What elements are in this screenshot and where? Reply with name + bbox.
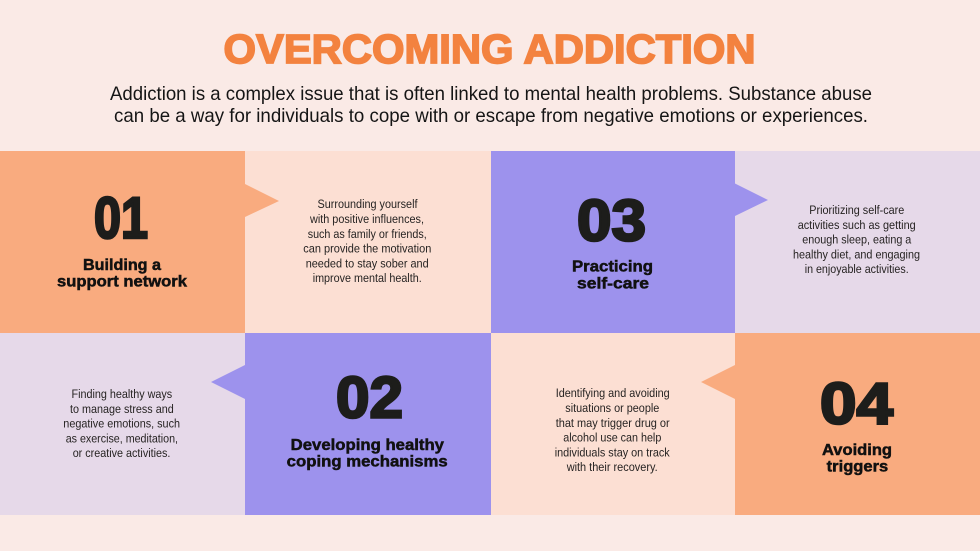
arrow: 02 pointing left [211,365,245,399]
text: 02 description: or creative activities. [73,446,170,460]
text: 01 description: needed to stay sober and [306,256,429,270]
text: 02 description: to manage stress and [70,402,174,416]
panel: 04 description [491,333,735,515]
text: 03 description: activities such as getting [798,218,916,232]
heading: building a support network [57,257,187,291]
panel: 03 practicing self-care [491,151,768,333]
number 04: 04 [820,372,893,436]
text: 03 description: in enjoyable activities. [805,262,909,276]
number 03: 03 [577,188,646,254]
arrow: 04 pointing left [701,365,735,399]
text: 03 description: healthy diet, and engaging [793,248,920,262]
text: 04 description: with their recovery. [566,460,658,474]
text: 04 description: situations or people [565,401,659,415]
panel: 01 description [245,151,491,333]
panel: 02 developing healthy coping mechanisms [211,333,491,515]
intro text: can be a way for individuals to cope with or escape from negative emotions or experiences. [114,105,868,127]
intro text [110,83,872,127]
text: 04 description: alcohol use can help [563,430,661,444]
heading: practicing self-care: Practicing [572,259,653,276]
panel: 02 description [0,333,245,515]
text: 04 description [555,386,671,474]
heading: developing healthy coping mechanisms [287,437,448,471]
intro text: Addiction is a complex issue that is often linked to mental health problems. Substance abuse [110,83,872,105]
text: 01 description: with positive influences, [309,212,424,226]
text: 01 description: such as family or friends, [308,227,427,241]
panel: 01 building a support network [0,151,279,333]
arrow: 01 pointing right [245,184,279,217]
text: 03 description: enough sleep, eating a [802,233,911,247]
panel: 04 avoiding triggers [701,333,980,515]
heading: developing healthy coping mechanisms: Developing healthy [291,437,444,454]
heading: building a support network: Building a [83,257,161,274]
text: 01 description [303,197,431,285]
text: 01 description: Surrounding yourself [318,197,418,211]
heading: avoiding triggers: triggers [827,459,888,476]
title: OVERCOMING ADDICTION [224,26,756,72]
heading: avoiding triggers: Avoiding [822,442,892,459]
heading: practicing self-care [572,259,653,292]
heading: practicing self-care: self-care [577,275,649,292]
text: 03 description [793,203,920,276]
panel: 03 description [735,151,980,333]
text: 02 description: Finding healthy ways [72,387,172,401]
text: 02 description [63,387,180,460]
text: 02 description: as exercise, meditation, [66,432,178,446]
text: 03 description: Prioritizing self-care [809,203,904,217]
heading: building a support network: support network [57,274,187,291]
text: 04 description: that may trigger drug or [556,416,670,430]
heading: avoiding triggers [822,442,892,476]
text: 01 description: improve mental health. [313,271,422,285]
arrow: 03 pointing right [735,184,768,216]
heading: developing healthy coping mechanisms: coping mechanisms [287,454,448,471]
text: 04 description: Identifying and avoiding [556,386,670,400]
text: 04 description: individuals stay on track [555,445,671,459]
text: 02 description: negative emotions, such [63,417,180,431]
text: 01 description: can provide the motivation [303,242,431,256]
number 01: 01 [94,186,148,251]
number 02: 02 [336,366,403,430]
